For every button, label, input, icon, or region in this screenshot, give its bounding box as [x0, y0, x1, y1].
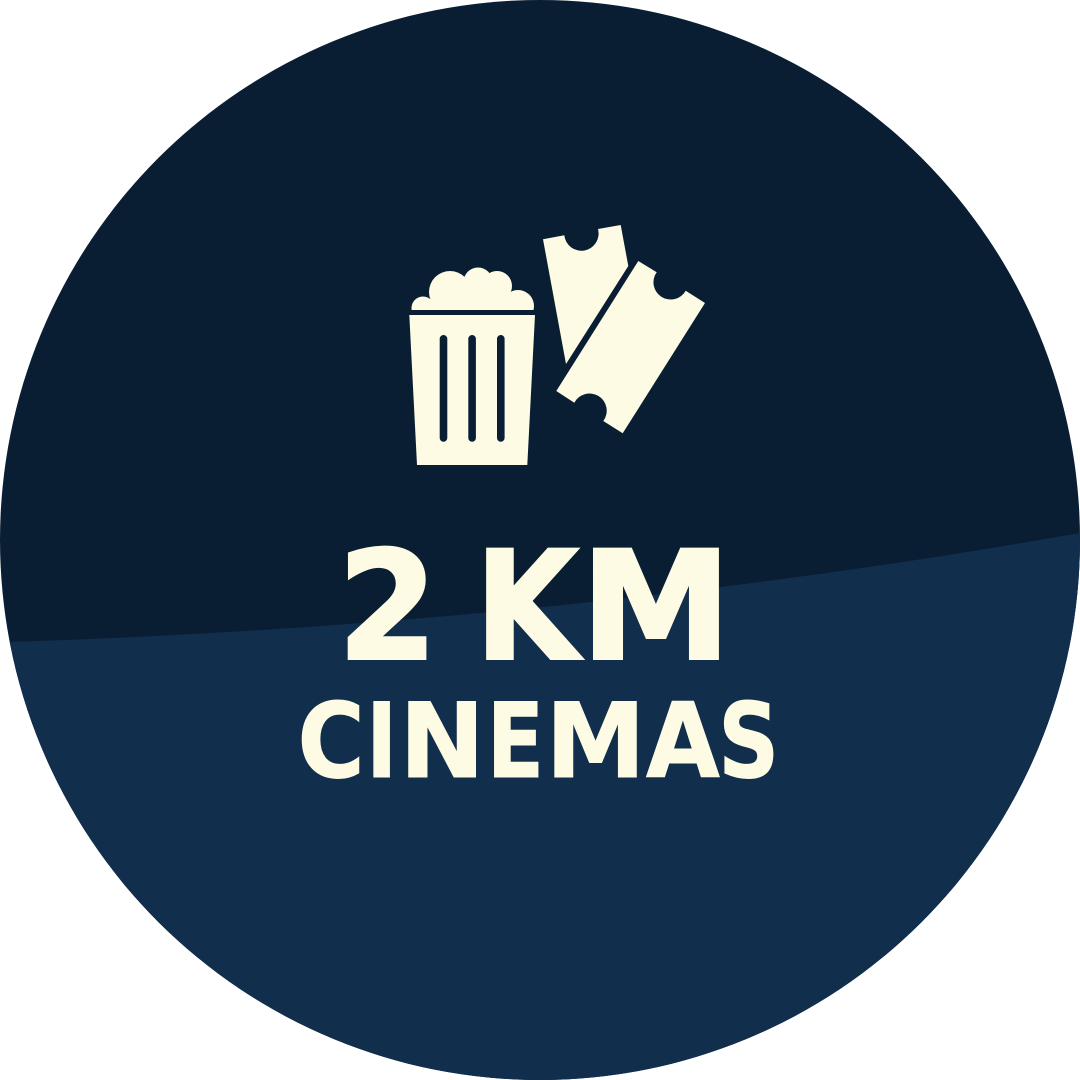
heading: CINEMAS: N	[399, 682, 485, 802]
popcorn top	[412, 268, 534, 310]
icon: popcorn bucket	[409, 268, 535, 465]
heading: CINEMAS: A	[646, 682, 720, 802]
heading: CINEMAS: M	[546, 682, 646, 802]
bucket body	[409, 315, 535, 465]
heading: 2 KM: 2	[338, 520, 437, 694]
back ticket	[543, 225, 628, 364]
heading: CINEMAS: S	[718, 682, 779, 802]
front ticket	[556, 261, 705, 433]
heading: CINEMAS: I	[366, 682, 397, 802]
heading: CINEMAS: E	[487, 682, 544, 802]
heading: 2 KM: K	[475, 520, 582, 694]
lighter lower wave	[0, 533, 1080, 1080]
heading: CINEMAS: C	[298, 682, 365, 802]
icon: cinema tickets	[543, 225, 705, 433]
heading: 2 KM: M	[581, 520, 731, 694]
